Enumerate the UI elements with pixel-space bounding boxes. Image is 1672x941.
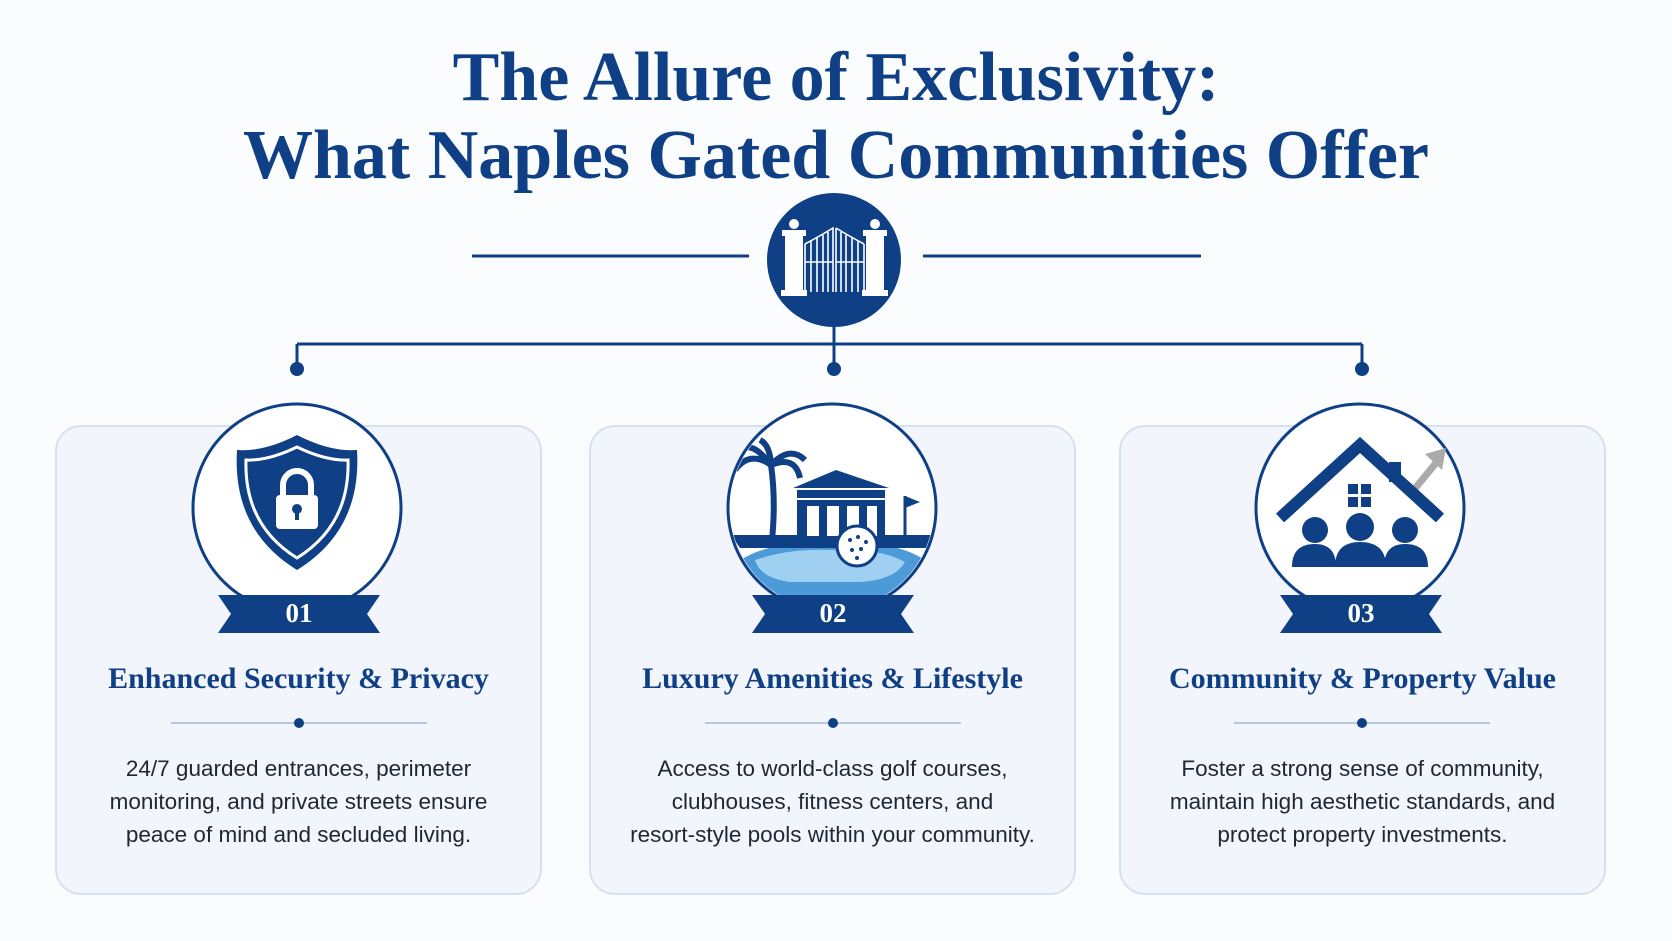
number 03: 03 <box>1348 598 1374 628</box>
text 3: maintain high aesthetic standards, and <box>1170 789 1555 814</box>
icon circle 2: resort amenities <box>728 404 940 612</box>
text 2: resort-style pools within your community. <box>630 822 1035 847</box>
icon: gate medallion <box>767 193 901 327</box>
text 3: Foster a strong sense of community, <box>1181 756 1544 781</box>
title: The Allure of Exclusivity: <box>453 39 1219 116</box>
text 3 <box>1170 756 1555 847</box>
dividers <box>171 722 1490 724</box>
text 1: peace of mind and secluded living. <box>126 822 471 847</box>
text 1: monitoring, and private streets ensure <box>110 789 487 814</box>
card 3 background <box>1119 425 1606 895</box>
card 1 background <box>55 425 542 895</box>
number 02: 02 <box>820 598 846 628</box>
title: What Naples Gated Communities Offer <box>243 117 1429 194</box>
text 2: Access to world-class golf courses, <box>657 756 1008 781</box>
number 01: 01 <box>286 598 312 628</box>
heading 1: Enhanced Security & Privacy <box>108 662 489 695</box>
graphics layer <box>171 193 1490 728</box>
title <box>243 39 1429 194</box>
text 2 <box>630 756 1035 847</box>
text 3: protect property investments. <box>1217 822 1508 847</box>
side lines <box>472 254 1201 258</box>
connector tree <box>290 320 1369 376</box>
icon circle 3: house & community <box>1256 404 1464 612</box>
text 1: 24/7 guarded entrances, perimeter <box>126 756 471 781</box>
text 2: clubhouses, fitness centers, and <box>672 789 993 814</box>
card 2 background <box>589 425 1076 895</box>
icon circle 1: shield <box>193 404 401 612</box>
ribbons <box>218 595 1442 633</box>
heading 2: Luxury Amenities & Lifestyle <box>642 662 1023 695</box>
heading 3: Community & Property Value <box>1169 662 1556 695</box>
text 1 <box>110 756 487 847</box>
